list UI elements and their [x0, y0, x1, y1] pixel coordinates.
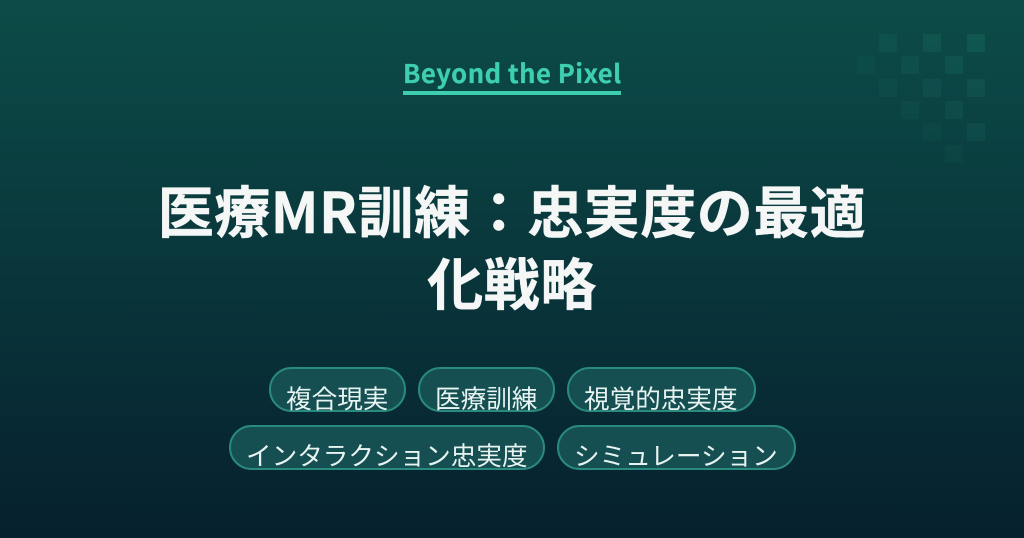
tag text: インタラクション忠実度: インタラクション忠実度	[246, 436, 528, 473]
decorative square pattern	[923, 34, 985, 141]
tag text: シミュレーション: シミュレーション	[574, 436, 778, 473]
tag text: 複合現実: 複合現実	[286, 379, 388, 416]
tag: 視覚的忠実度	[567, 367, 756, 412]
tag: 医療訓練	[418, 367, 555, 412]
eyebrow heading: Beyond the Pixel: Beyond the Pixel	[403, 54, 622, 91]
title: 医療MR訓練：忠実度の最適	[158, 169, 866, 250]
eyebrow underline	[403, 91, 621, 95]
title: 化戦略	[427, 241, 597, 322]
tag text: 視覚的忠実度: 視覚的忠実度	[584, 379, 738, 416]
tag: 複合現実	[269, 367, 406, 412]
tag: インタラクション忠実度	[229, 425, 545, 470]
tag: シミュレーション	[557, 425, 796, 470]
title	[158, 169, 866, 322]
tag text: 医療訓練: 医療訓練	[435, 379, 537, 416]
